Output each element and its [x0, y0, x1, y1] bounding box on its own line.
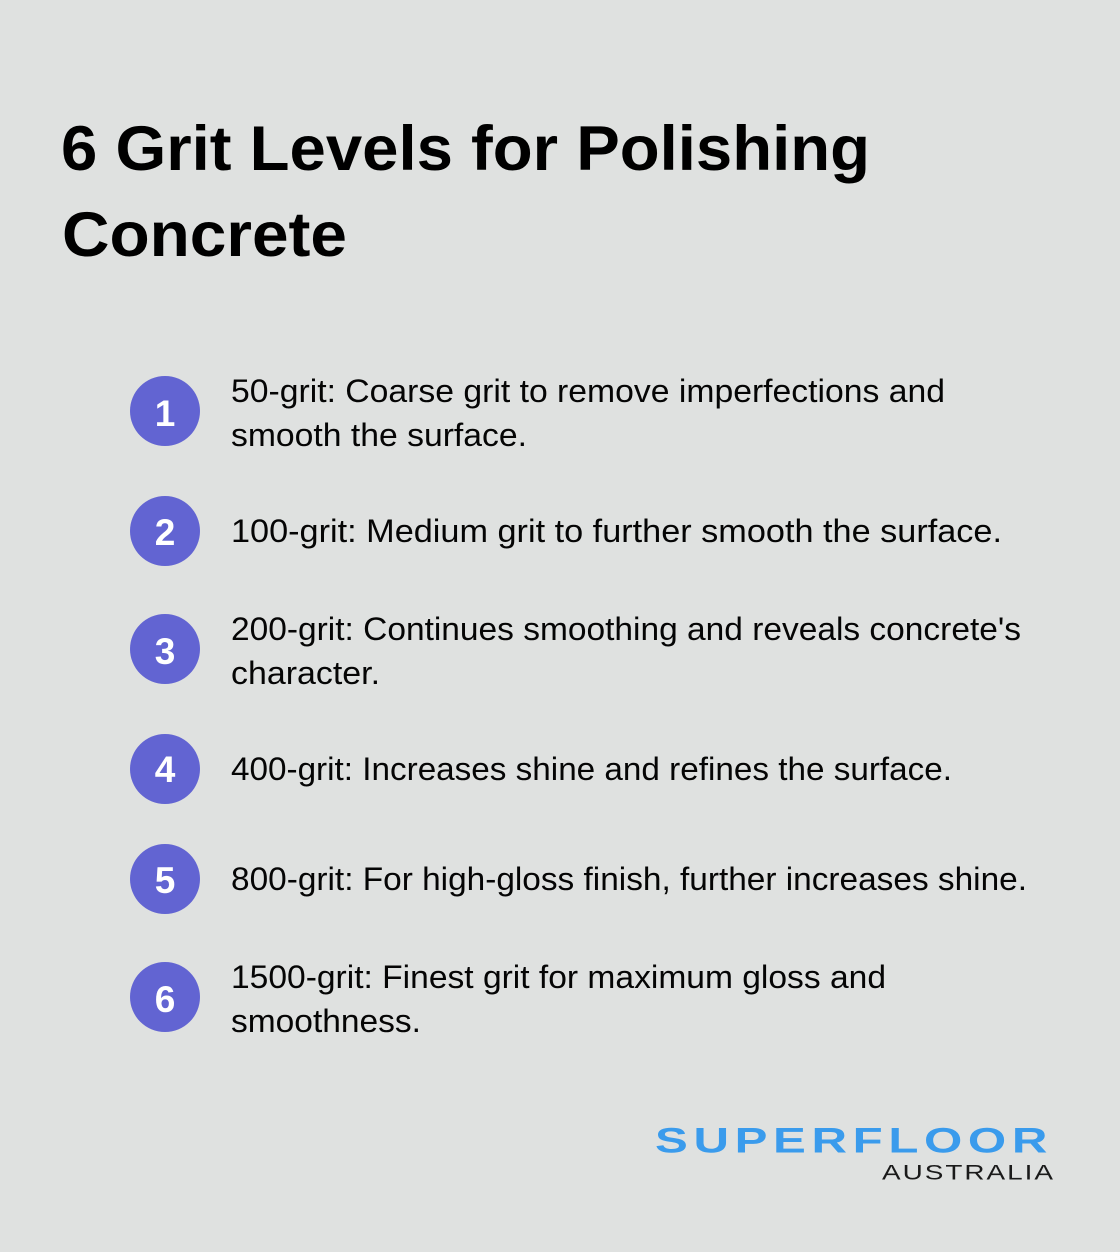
step 5: [130, 844, 1027, 914]
step 3 badge: [130, 614, 200, 684]
step 2 badge: 2: [155, 512, 175, 553]
logo: Superfloor Australia: [655, 1122, 1055, 1184]
step 1 text: 50-grit: Coarse grit to remove imperfections and: [231, 373, 945, 409]
step 5 badge: 5: [155, 860, 175, 901]
step 2: [130, 496, 1002, 566]
step 4 badge: [130, 734, 200, 804]
step 1 badge: 1: [155, 393, 175, 434]
step 2 text: 100-grit: Medium grit to further smooth the surface.: [231, 513, 1002, 549]
step 6: [130, 959, 886, 1039]
step 1 text: [231, 373, 945, 453]
step 3 badge: 3: [155, 631, 175, 672]
step 1 text: smooth the surface.: [231, 417, 527, 453]
step 6 text: 1500-grit: Finest grit for maximum gloss and: [231, 959, 886, 995]
step 1: [130, 373, 945, 453]
step 2 badge: [130, 496, 200, 566]
title: [61, 114, 870, 270]
step 6 badge: [130, 962, 200, 1032]
step 1 badge: [130, 376, 200, 446]
step 4 badge: 4: [155, 749, 176, 790]
step 3 text: 200-grit: Continues smoothing and reveals concrete's: [231, 611, 1021, 647]
step 4: [130, 734, 952, 804]
title: 6 Grit Levels for Polishing: [61, 114, 870, 184]
title: Concrete: [62, 200, 347, 270]
step 5 text: 800-grit: For high-gloss finish, further increases shine.: [231, 861, 1027, 897]
step 6 badge: 6: [155, 979, 175, 1020]
logo: Superfloor Australia: AUSTRALIA: [882, 1162, 1055, 1184]
step 4 text: 400-grit: Increases shine and refines the surface.: [231, 751, 952, 787]
step 3: [130, 611, 1021, 691]
step 3 text: [231, 611, 1021, 691]
step 3 text: character.: [231, 655, 380, 691]
step 6 text: smoothness.: [231, 1003, 421, 1039]
step 5 badge: [130, 844, 200, 914]
logo: Superfloor Australia: SUPERFLOOR: [655, 1122, 1053, 1160]
step 6 text: [231, 959, 886, 1039]
